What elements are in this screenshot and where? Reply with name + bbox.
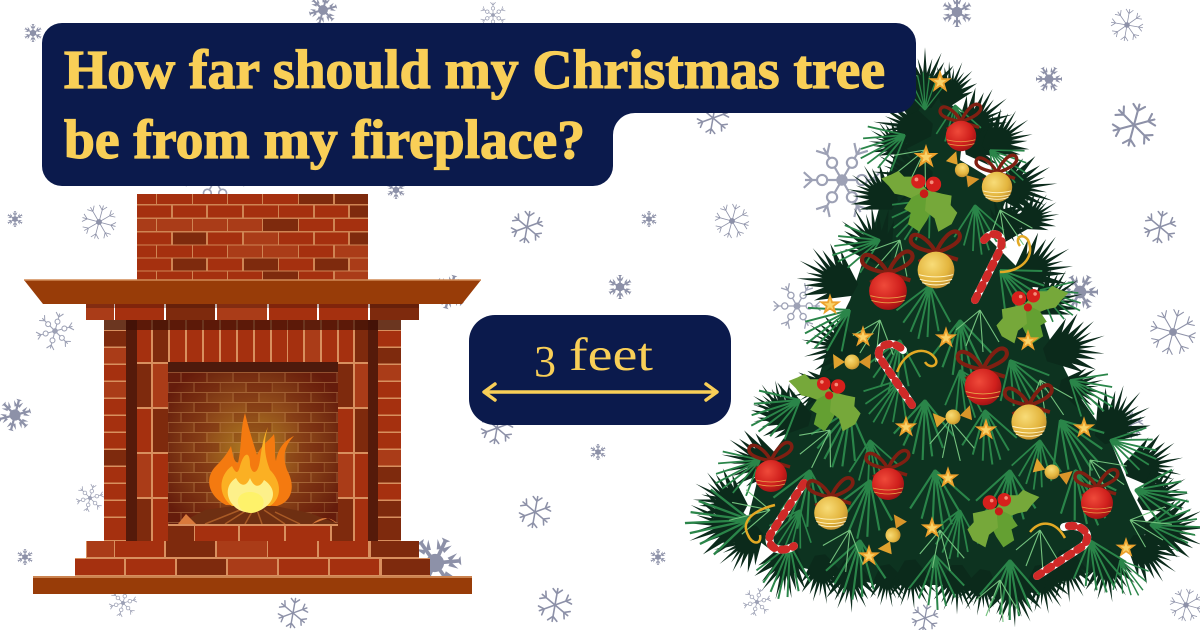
arch header bricks [137,320,368,362]
hearth base [33,576,472,594]
chimney [137,194,368,280]
candy canes [769,234,1087,576]
logs [178,505,338,524]
gold ribbons [746,236,1065,542]
distance label: feet [569,329,653,381]
brick row under mantel [86,304,419,320]
red baubles [749,104,1118,519]
left pillar [137,364,168,541]
right pillar [338,364,368,541]
double-headed arrow [484,384,717,400]
fireplace [24,194,481,594]
lighter needles [682,71,1200,622]
surround body [104,320,401,541]
holly sprigs [789,171,1068,547]
top shadow band [104,320,401,330]
front bricks [168,524,338,541]
christmas tree [682,47,1200,628]
flames [209,413,294,513]
hearth step lower [75,558,430,576]
distance callout [469,315,731,425]
firebox [168,362,338,541]
gold stars [819,70,1137,565]
title text line 2: be from my fireplace? [64,109,585,170]
tree foliage [682,47,1200,628]
wrapped sweets [833,151,1073,555]
distance label: 3 [534,337,556,386]
right column bricks [378,331,401,540]
gold baubles [808,155,1052,530]
mantel shelf [24,280,481,304]
distance label [534,329,653,386]
left column bricks [104,331,126,540]
title banner [42,23,916,186]
hearth step upper [86,541,419,559]
title text line 1: How far should my Christmas tree [64,39,885,100]
